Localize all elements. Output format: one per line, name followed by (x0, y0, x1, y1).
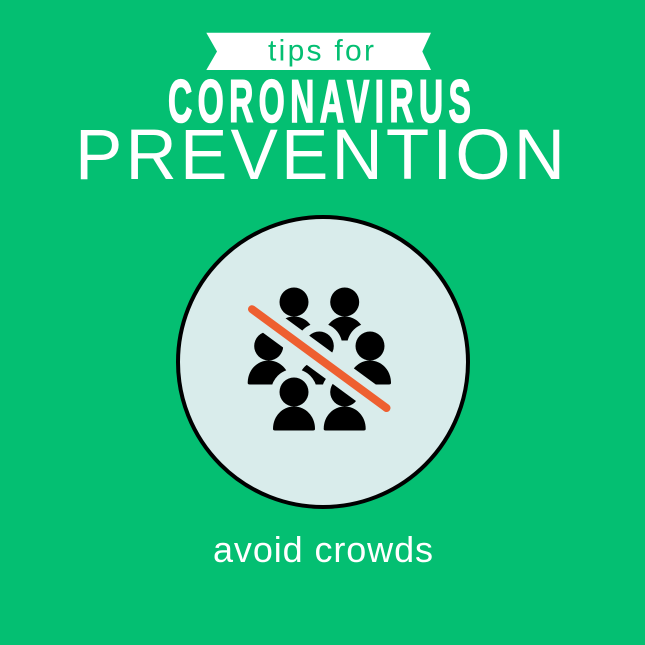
person: top left (273, 288, 315, 340)
person: right (347, 323, 393, 384)
person: top right (324, 288, 366, 340)
title: prevention: PREVENTION (75, 116, 565, 195)
person: left (246, 323, 292, 384)
title: coronavirus: CORONAVIRUS (168, 69, 471, 136)
panel: icon circle (178, 217, 468, 507)
icon: crowd of people crossed out (240, 288, 398, 430)
banner: tips for: tips for (268, 35, 374, 68)
person: bottom right (322, 369, 368, 430)
person: bottom left (271, 369, 317, 430)
banner: tips for (206, 33, 431, 70)
slash: prohibition line (240, 300, 398, 416)
person: middle (296, 323, 342, 384)
caption: avoid crowds: avoid crowds (213, 529, 433, 570)
